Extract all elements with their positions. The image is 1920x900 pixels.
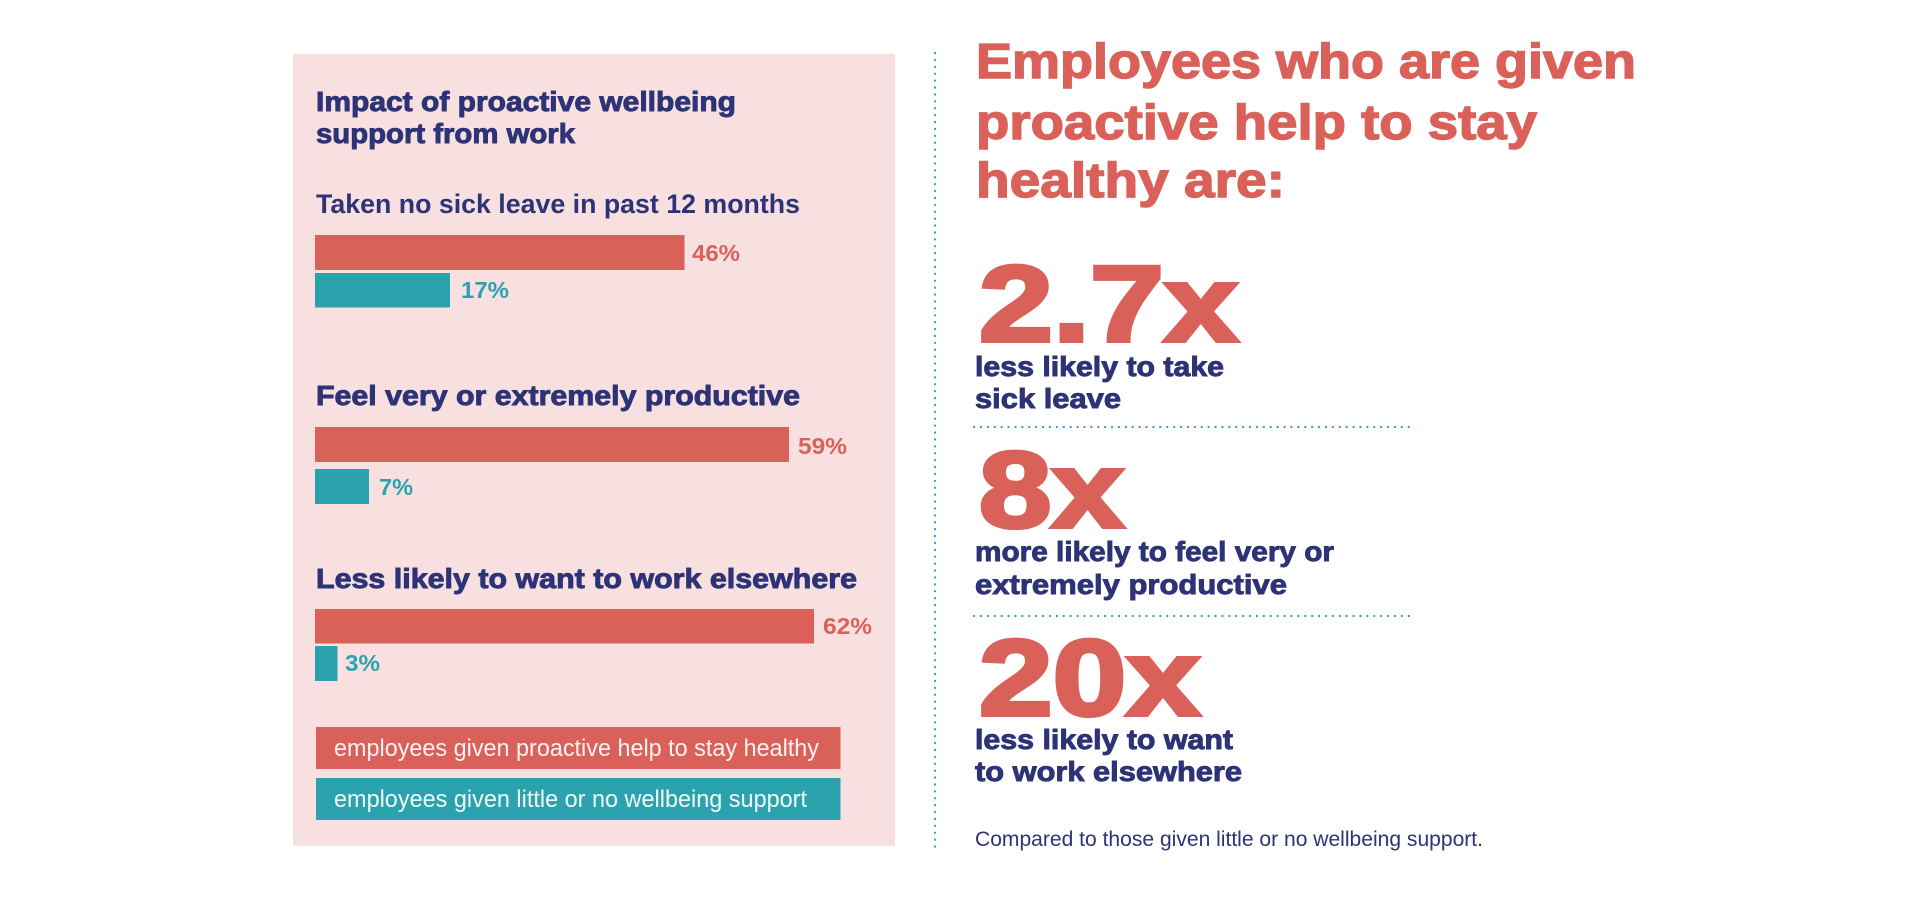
legend: employees given proactive help to stay healthy bbox=[334, 735, 819, 762]
bar group: feel very or extremely productive: 59% bbox=[798, 433, 847, 459]
bar group: taken no sick leave bbox=[315, 189, 800, 308]
stat: 2.7x bbox=[975, 243, 1238, 414]
stat: 20x bbox=[975, 617, 1242, 787]
stat: 8x: 8x bbox=[979, 429, 1124, 550]
stat: 20x: 20x bbox=[979, 617, 1200, 738]
panel heading: Impact of proactive wellbeing bbox=[316, 86, 736, 117]
stat: 20x: to work elsewhere bbox=[975, 756, 1242, 787]
bar group: less likely to want to work elsewhere bbox=[315, 563, 872, 681]
bar group: less likely to want to work elsewhere: Less likely to want to work elsewhere bbox=[316, 563, 857, 594]
heading: employees given proactive help: Employees who are given bbox=[976, 35, 1636, 89]
stat: 8x bbox=[975, 429, 1334, 600]
panel heading: support from work bbox=[316, 118, 575, 149]
legend bbox=[316, 727, 840, 820]
bar group: less likely to want to work elsewhere: 62% bbox=[823, 613, 872, 639]
bar group: feel very or extremely productive: 7% bbox=[379, 474, 413, 500]
panel: impact of proactive wellbeing support bbox=[293, 54, 895, 846]
stat: 8x: more likely to feel very or bbox=[975, 536, 1334, 567]
bar group: less likely to want to work elsewhere: 3% bbox=[345, 650, 380, 676]
heading: employees given proactive help: healthy are: bbox=[976, 154, 1285, 208]
stat: 8x: extremely productive bbox=[975, 569, 1287, 600]
stat: 2.7x: less likely to take bbox=[975, 351, 1224, 382]
heading: employees given proactive help bbox=[976, 35, 1636, 208]
stat: 2.7x: 2.7x bbox=[979, 243, 1238, 364]
bar group: feel very or extremely productive: Feel very or extremely productive bbox=[316, 380, 800, 411]
bar group: taken no sick leave: Taken no sick leave in past 12 months bbox=[316, 189, 800, 219]
panel heading bbox=[316, 86, 736, 149]
footnote: Compared to those given little or no wellbeing support. bbox=[975, 828, 1483, 851]
bar group: taken no sick leave: 46% bbox=[692, 240, 740, 266]
legend: employees given little or no wellbeing support bbox=[334, 786, 807, 813]
stat: 2.7x: sick leave bbox=[975, 383, 1121, 414]
bar group: feel very or extremely productive bbox=[315, 380, 847, 504]
stat: 20x: less likely to want bbox=[975, 724, 1233, 755]
bar group: taken no sick leave: 17% bbox=[461, 277, 509, 303]
heading: employees given proactive help: proactive help to stay bbox=[976, 96, 1537, 150]
